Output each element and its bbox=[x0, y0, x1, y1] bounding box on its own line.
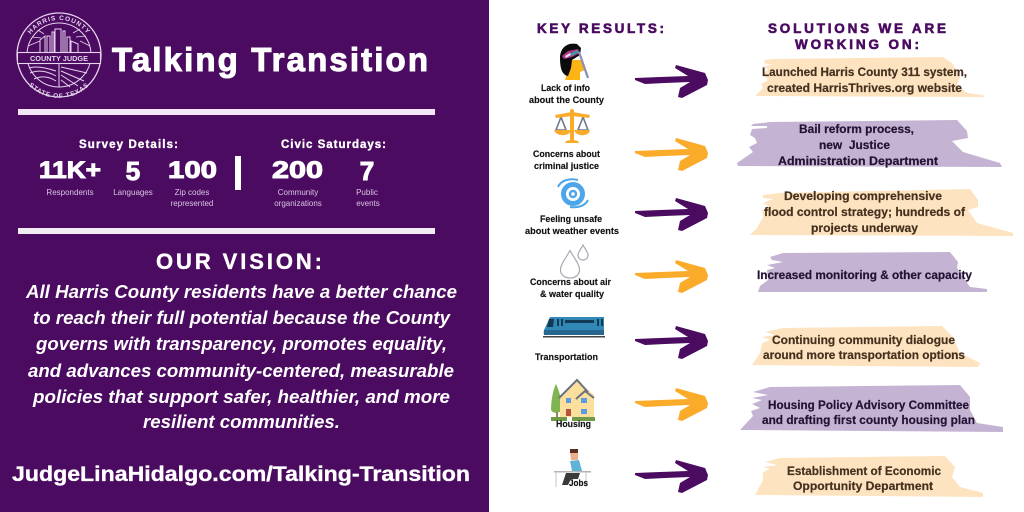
arrow 3 bbox=[635, 198, 708, 231]
icon: train bbox=[543, 317, 605, 338]
stat: 5 languages: Languages bbox=[113, 188, 153, 197]
label: Jobs bbox=[569, 478, 588, 488]
divider bar top bbox=[18, 109, 435, 115]
icon: water drops bbox=[560, 245, 588, 278]
solution 3: flood control strategy; hundreds of bbox=[764, 207, 965, 219]
solution 1: Launched Harris County 311 system, bbox=[762, 67, 967, 79]
stat: 100 zip codes bbox=[168, 157, 217, 208]
vision heading: OUR VISION: bbox=[156, 249, 322, 274]
brush: peach bbox=[755, 456, 983, 497]
solution 5: Continuing community dialogue bbox=[772, 335, 955, 347]
icon: person at desk bbox=[554, 449, 591, 487]
stat: 7 public events: events bbox=[356, 199, 380, 208]
label bbox=[533, 149, 600, 171]
solution 3: Developing comprehensive bbox=[784, 191, 942, 203]
label: Housing bbox=[556, 419, 591, 429]
solution 5: around more transportation options bbox=[763, 350, 965, 362]
row 5: transportation bbox=[535, 317, 605, 362]
stat: 7 public events: Public bbox=[356, 188, 378, 197]
civic saturdays heading: Civic Saturdays: bbox=[281, 139, 386, 151]
stat: 200 community organizations: 200 bbox=[272, 157, 323, 184]
solution 2 bbox=[737, 120, 1002, 168]
vision paragraph: All Harris County residents have a better chance bbox=[25, 282, 457, 302]
label: Lack of info bbox=[541, 83, 590, 93]
label: Transportation bbox=[535, 352, 598, 362]
stat: 200 community organizations bbox=[272, 157, 323, 208]
solution 6: and drafting first county housing plan bbox=[762, 415, 975, 427]
title: Talking Transition bbox=[112, 41, 428, 78]
label bbox=[529, 83, 604, 105]
heading: key results: KEY RESULTS: bbox=[537, 21, 664, 36]
stat: 11K+ respondents: Respondents bbox=[46, 188, 94, 197]
stat: 100 zip codes: 100 bbox=[168, 157, 217, 184]
survey details heading: Survey Details: bbox=[79, 139, 178, 151]
row 2: criminal justice bbox=[533, 109, 600, 171]
icon: hurricane swirl bbox=[558, 179, 588, 207]
label: criminal justice bbox=[534, 161, 599, 171]
solution 4 bbox=[757, 252, 987, 292]
label: Concerns about bbox=[533, 149, 600, 159]
brush: peach bbox=[752, 326, 980, 367]
logo: Harris County Judge seal: HARRIS COUNTY bbox=[27, 16, 90, 34]
solution 5 bbox=[752, 326, 980, 367]
arrow 2 bbox=[635, 138, 708, 171]
row 6: housing bbox=[551, 380, 595, 429]
solution 1 bbox=[755, 57, 984, 97]
heading: solutions bbox=[768, 21, 946, 52]
heading: solutions: SOLUTIONS WE ARE bbox=[768, 21, 946, 36]
stat: 200 community organizations: Community bbox=[278, 188, 318, 197]
brush: peach bbox=[755, 57, 984, 97]
arrow 6 bbox=[635, 388, 708, 421]
vision paragraph: governs with transparency, promotes equality, bbox=[35, 334, 447, 354]
icon: head with hair bbox=[560, 44, 588, 80]
label: Concerns about air bbox=[530, 277, 611, 287]
stat: 7 public events: 7 bbox=[360, 156, 374, 186]
brush: purple bbox=[758, 252, 987, 292]
solution 7: Establishment of Economic bbox=[787, 466, 942, 478]
label bbox=[530, 277, 611, 299]
stat: 7 public events bbox=[356, 156, 380, 208]
arrow 7 bbox=[635, 460, 708, 493]
stat: 100 zip codes: Zip codes bbox=[175, 188, 209, 197]
label: Feeling unsafe bbox=[540, 214, 602, 224]
website link: JudgeLinaHidalgo.com/Talking-Transition bbox=[12, 463, 470, 486]
row 1: lack of info bbox=[529, 44, 604, 105]
icon: scales of justice bbox=[554, 109, 590, 143]
solution 7 bbox=[755, 456, 983, 497]
panel: purple left background bbox=[0, 0, 489, 512]
label: & water quality bbox=[540, 289, 604, 299]
stat: 100 zip codes: represented bbox=[171, 199, 213, 208]
solution 2: Administration Department bbox=[778, 156, 938, 168]
arrow 5 bbox=[635, 326, 708, 359]
arrow 4 bbox=[635, 260, 708, 293]
solution 6 bbox=[740, 385, 1003, 432]
arrow 1 bbox=[635, 65, 708, 98]
brush: purple bbox=[740, 385, 1003, 432]
label: about the County bbox=[529, 95, 604, 105]
stat: 5 languages bbox=[113, 156, 153, 197]
vision paragraph: policies that support safer, healthier, and more bbox=[32, 387, 450, 407]
heading: solutions: WORKING ON: bbox=[795, 37, 919, 52]
divider bar bottom bbox=[18, 228, 435, 234]
solution 2: Bail reform process, bbox=[799, 124, 914, 136]
logo: Harris County Judge seal: STATE OF TEXAS bbox=[29, 82, 88, 98]
row 3: weather bbox=[525, 179, 619, 236]
vision paragraph: and advances community-centered, measurable bbox=[28, 361, 454, 381]
stat: 11K+ respondents bbox=[39, 157, 101, 197]
stat: 5 languages: 5 bbox=[126, 156, 140, 186]
solution 3 bbox=[750, 189, 1013, 236]
vision paragraph: to reach their full potential because the County bbox=[33, 308, 451, 328]
label bbox=[525, 214, 619, 236]
solution 2: new Justice bbox=[819, 140, 890, 152]
stat: 200 community organizations: organizations bbox=[274, 199, 322, 208]
solution 3: projects underway bbox=[811, 223, 919, 235]
vision paragraph: resilient communities. bbox=[143, 412, 340, 432]
row 7: jobs bbox=[554, 449, 591, 488]
logo: Harris County Judge seal bbox=[16, 12, 102, 98]
logo: Harris County Judge seal: COUNTY JUDGE bbox=[30, 56, 88, 63]
label: about weather events bbox=[525, 226, 619, 236]
stat: 11K+ respondents: 11K+ bbox=[39, 157, 101, 184]
solution 7: Opportunity Department bbox=[793, 481, 933, 493]
vision paragraph bbox=[25, 282, 457, 432]
solution 6: Housing Policy Advisory Committee bbox=[768, 400, 969, 412]
brush: purple bbox=[737, 120, 1002, 167]
brush: peach bbox=[750, 189, 1013, 236]
vertical separator bbox=[235, 156, 241, 190]
solution 1: created HarrisThrives.org website bbox=[767, 83, 962, 95]
icon: house with tree bbox=[551, 380, 595, 421]
row 4: air and water bbox=[530, 245, 611, 299]
solution 4: Increased monitoring & other capacity bbox=[757, 270, 973, 282]
